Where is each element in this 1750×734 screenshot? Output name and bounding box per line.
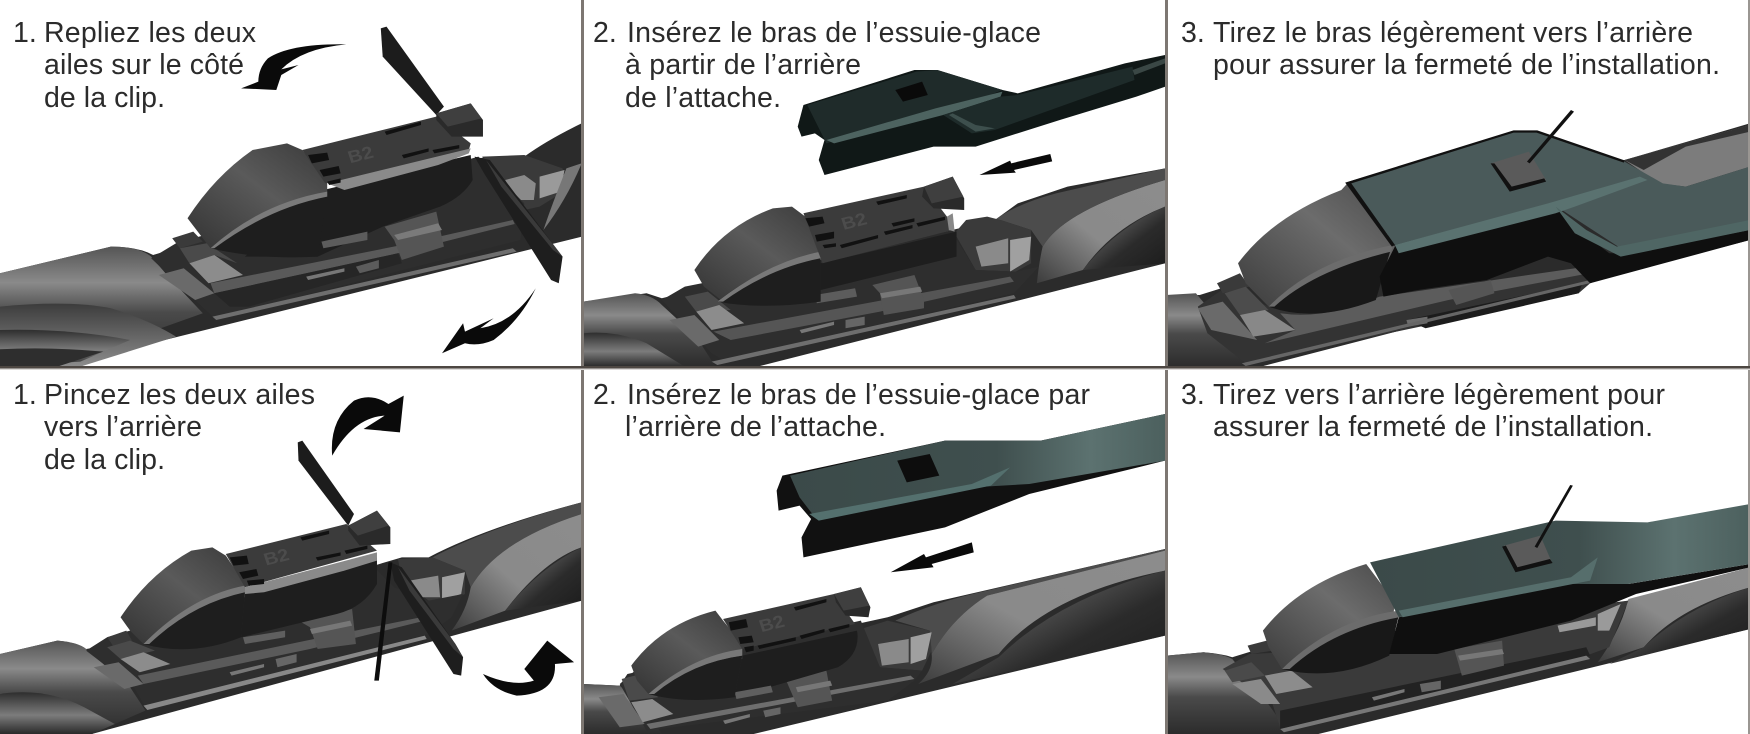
caption: bottom step 2: [593, 379, 1090, 443]
caption: bottom step 3: [1181, 379, 1666, 443]
clip logo mark: B2: [261, 544, 292, 569]
clip logo mark: B2: [345, 142, 376, 167]
caption: top step 3: pour assurer la fermeté de l’installation.: [1213, 49, 1720, 81]
caption: top step 3: Tirez le bras légèrement vers l’arrière: [1213, 17, 1693, 49]
wiper blade: [583, 168, 1165, 367]
pointer line: [1527, 110, 1574, 163]
arrow: curved lower: [442, 288, 536, 353]
folded wing lower: [390, 562, 463, 676]
caption: top step 2: Insérez le bras de l’essuie-glace: [627, 17, 1041, 49]
folded wing upper: [381, 27, 483, 137]
wiper arm: [798, 55, 1165, 175]
clip logo mark: B2: [756, 611, 787, 636]
pointer line: [1535, 485, 1573, 548]
caption: top step 3: [1181, 17, 1720, 81]
clip cap: [1238, 182, 1395, 314]
caption: top step 1: [13, 17, 256, 114]
caption: bottom step 2: 2.: [593, 379, 617, 411]
clip tray: [151, 157, 524, 320]
caption: bottom step 3: Tirez vers l’arrière légèrement pour: [1213, 379, 1666, 411]
caption: top step 2: de l’attache.: [625, 82, 781, 114]
caption: top step 2: [593, 17, 1041, 114]
clip tray: [1223, 601, 1628, 732]
caption: top step 1: Repliez les deux: [44, 17, 256, 49]
clip body and cap: [121, 524, 377, 649]
arrow: curved upper: [241, 44, 346, 90]
panel: top row step 3 pull arm back: [1167, 110, 1750, 367]
arrow: curved upper: [332, 396, 404, 456]
arm window: [1491, 152, 1546, 192]
folded wing upper: [298, 441, 390, 546]
wiper arm: [1370, 504, 1750, 654]
caption: bottom step 2: l’arrière de l’attache.: [625, 411, 886, 443]
panel: top row step 2 insert arm: [583, 55, 1165, 367]
arrow: curved lower: [483, 641, 574, 696]
arrow: insert direction: [891, 542, 974, 572]
caption: bottom step 3: assurer la fermeté de l’installation.: [1213, 411, 1653, 443]
caption: bottom step 1: vers l’arrière: [44, 411, 202, 443]
caption: top step 1: de la clip.: [44, 82, 165, 114]
panel: bottom row step 2 insert arm: [583, 414, 1165, 734]
panel: top row step 1 fold wings: [0, 27, 582, 367]
caption: bottom step 1: Pincez les deux ailes: [44, 379, 315, 411]
caption: top step 2: 2.: [593, 17, 617, 49]
caption: bottom step 1: [13, 379, 315, 476]
wiper arm: [1345, 130, 1750, 297]
caption: bottom step 1: 1.: [13, 379, 37, 411]
caption: top step 3: 3.: [1181, 17, 1205, 49]
wiper blade: [1167, 123, 1750, 367]
wiper arm: [777, 414, 1165, 557]
folded wing lower: [475, 157, 563, 283]
clip tray: [666, 260, 1016, 365]
caption: top step 1: ailes sur le côté: [44, 49, 244, 81]
caption: top step 2: à partir de l’arrière: [625, 49, 861, 81]
clip tray: [1198, 265, 1598, 366]
clip tray: [86, 594, 463, 710]
wiper blade: [583, 549, 1165, 734]
wiper blade: [0, 123, 582, 367]
clip body and cap: [694, 177, 964, 306]
caption: bottom step 3: 3.: [1181, 379, 1205, 411]
wiper blade: [1167, 567, 1750, 734]
caption: bottom step 1: de la clip.: [44, 444, 165, 476]
wiper blade: [0, 502, 582, 734]
clip body and cap: [631, 587, 870, 700]
caption: bottom step 2: Insérez le bras de l’essuie-glace par: [627, 379, 1090, 411]
clip cap: [1263, 564, 1399, 673]
arm window: [1502, 536, 1553, 572]
clip body and cap: [188, 117, 473, 257]
clip tray: [599, 621, 922, 731]
panel: bottom row step 1 pinch wings: [0, 396, 582, 734]
caption: top step 1: 1.: [13, 17, 37, 49]
clip logo mark: B2: [839, 209, 869, 234]
pointer line: [374, 562, 392, 681]
arrow: insert direction: [979, 154, 1052, 175]
panel: bottom row step 3 pull back: [1167, 485, 1750, 734]
